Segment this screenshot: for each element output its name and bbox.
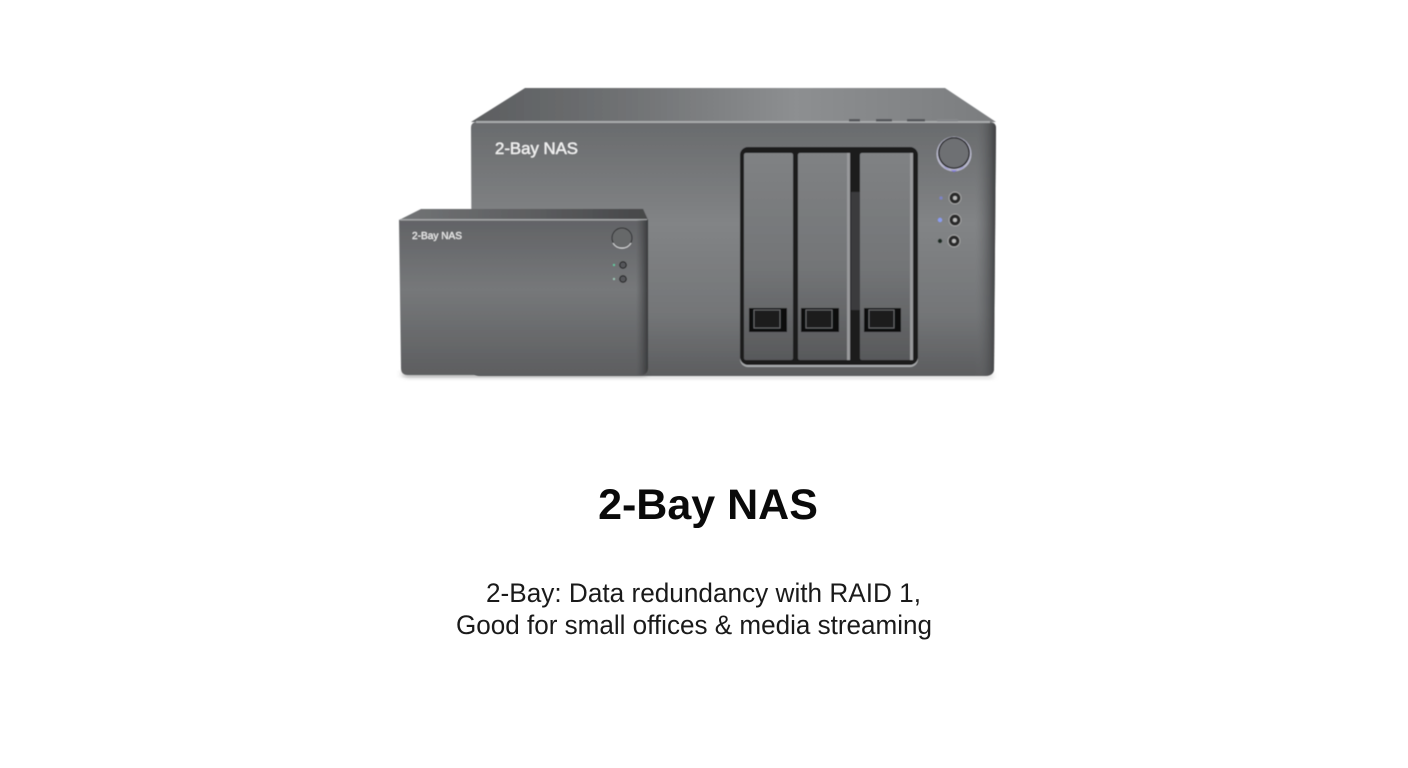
bay 3 gap detail [851,192,860,310]
power button [936,136,972,172]
front top highlight [400,219,647,221]
ground shadow [405,373,993,378]
status buttons [948,192,961,247]
small NAS device [399,209,648,376]
front face [399,220,648,375]
top face [471,88,996,122]
ground shadow [402,372,646,376]
large NAS device [405,88,996,378]
description text: Good for small offices & media streaming [456,610,932,640]
drive bay 3 [860,153,913,360]
rear vents [849,119,958,122]
description text: 2-Bay: Data redundancy with RAID 1, [486,578,921,608]
front top highlight [476,121,990,123]
device label: 2-Bay NAS [412,231,462,242]
description text [456,578,932,640]
drive bay frame [740,147,918,367]
power button ring [613,243,631,248]
drive bay 2 [798,153,850,360]
right edge shade [636,220,648,375]
top face [399,209,648,220]
status LEDs [613,264,615,280]
device label: 2-Bay NAS [495,139,578,158]
power button [612,228,632,248]
title: 2-Bay NAS [598,481,818,529]
front face [471,122,996,376]
right edge shade [975,123,996,376]
status LEDs [938,196,943,243]
drive bay 1 [744,153,793,360]
status buttons [620,262,626,282]
